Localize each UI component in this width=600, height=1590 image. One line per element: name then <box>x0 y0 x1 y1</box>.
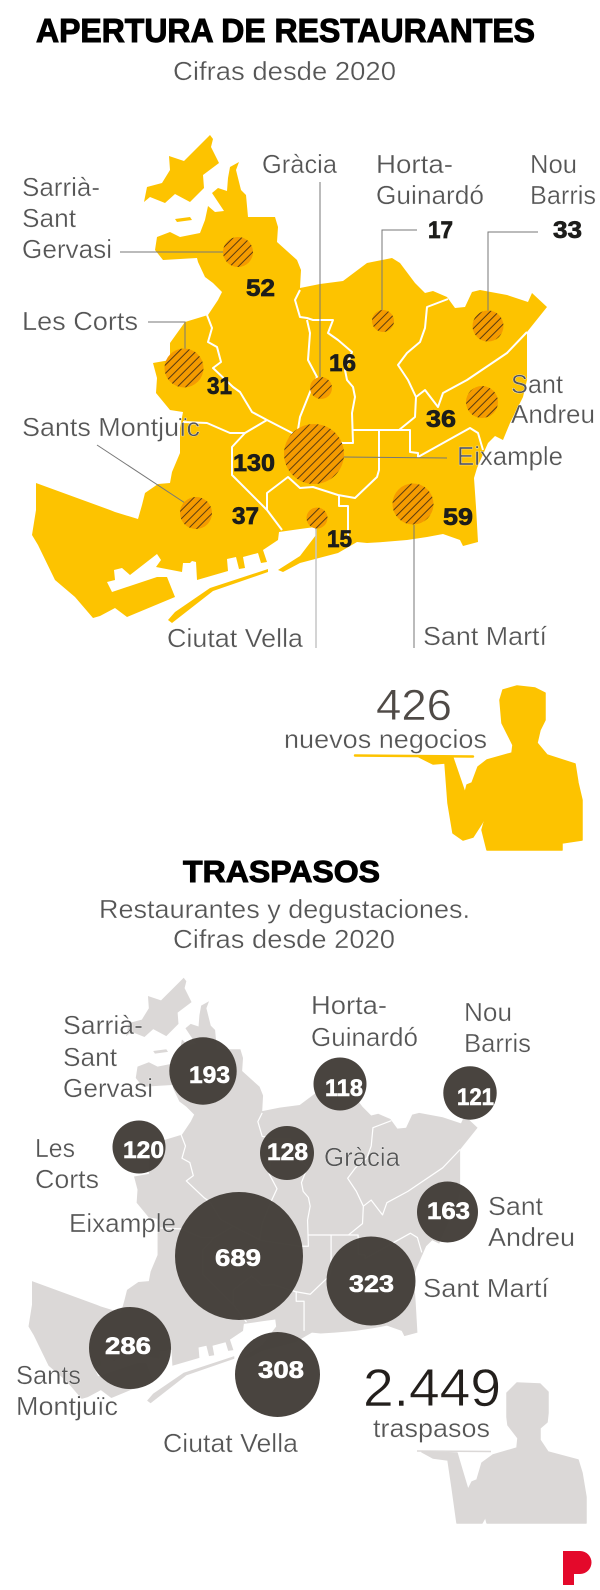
values openings: 15 <box>327 526 352 553</box>
district labels openings: Sant <box>511 369 564 399</box>
district labels openings: Andreu <box>511 399 595 429</box>
map: openings by district <box>32 135 547 623</box>
values openings: 130 <box>233 450 275 477</box>
district labels transfers: Corts <box>35 1164 99 1194</box>
district labels openings: Sant <box>22 203 77 233</box>
district labels transfers: Eixample <box>69 1208 176 1238</box>
bubbles transfers <box>89 1037 497 1417</box>
values openings: 16 <box>329 350 356 377</box>
leader lines openings <box>97 182 538 648</box>
district labels transfers: Ciutat Vella <box>163 1428 299 1458</box>
district labels openings <box>22 149 596 653</box>
district labels openings: Sarrià- <box>22 172 100 202</box>
district labels transfers: Horta- <box>311 990 387 1020</box>
values openings: 59 <box>443 504 473 531</box>
district labels openings: Ciutat Vella <box>167 623 304 653</box>
district labels openings: Gervasi <box>22 234 112 264</box>
subtitle traspasos <box>99 894 470 954</box>
total transfers <box>363 1359 501 1443</box>
values transfers: 128 <box>267 1139 308 1166</box>
district labels transfers <box>16 990 575 1458</box>
district labels transfers: Sants <box>16 1360 81 1390</box>
total openings: nuevos negocios <box>284 724 487 754</box>
values transfers: 286 <box>105 1333 151 1360</box>
district labels transfers: Sarrià- <box>63 1010 143 1040</box>
values transfers: 308 <box>258 1357 304 1384</box>
values transfers: 121 <box>457 1084 494 1111</box>
district labels openings: Nou <box>530 149 577 179</box>
values openings: 36 <box>426 406 456 433</box>
district labels openings: Barris <box>530 180 596 210</box>
district labels transfers: Gràcia <box>324 1142 401 1172</box>
total transfers: traspasos <box>373 1413 490 1443</box>
values transfers: 193 <box>189 1062 230 1089</box>
values transfers: 118 <box>325 1075 363 1102</box>
district labels transfers: Andreu <box>488 1222 575 1252</box>
values openings: 52 <box>246 275 275 302</box>
district labels transfers: Sant <box>63 1042 118 1072</box>
district labels openings: Gràcia <box>262 149 338 179</box>
values openings: 17 <box>428 217 453 244</box>
values transfers <box>105 1062 494 1384</box>
district labels transfers: Gervasi <box>63 1073 153 1103</box>
icon: yellow waiter <box>355 686 582 850</box>
total openings <box>284 681 487 754</box>
total transfers: 2.449 <box>363 1359 501 1418</box>
subtitle traspasos: Cifras desde 2020 <box>173 924 395 954</box>
district labels openings: Horta- <box>376 149 453 179</box>
district labels transfers: Nou <box>464 997 512 1027</box>
subtitle: Cifras desde 2020 <box>173 56 396 86</box>
values openings: 37 <box>232 503 259 530</box>
subtitle traspasos: Restaurantes y degustaciones. <box>99 894 470 924</box>
values transfers: 120 <box>123 1137 164 1164</box>
district labels openings: Eixample <box>457 441 563 471</box>
values openings <box>207 217 582 553</box>
values transfers: 689 <box>215 1245 261 1272</box>
total openings: 426 <box>376 681 452 730</box>
title: APERTURA DE RESTAURANTES <box>36 12 535 49</box>
district labels openings: Sant Martí <box>423 621 548 651</box>
logo: red P <box>563 1551 592 1585</box>
heading: traspasos: TRASPASOS <box>183 854 380 889</box>
district labels openings: Les Corts <box>22 306 138 336</box>
map: transfers by district <box>29 978 478 1403</box>
bubbles openings <box>164 237 504 529</box>
values openings: 31 <box>207 373 232 400</box>
icon: grey waiter <box>417 1383 586 1523</box>
district labels transfers: Sant <box>488 1191 544 1221</box>
district labels openings: Sants Montjuïc <box>22 412 200 442</box>
district labels transfers: Les <box>35 1133 75 1163</box>
district labels transfers: Guinardó <box>311 1022 418 1052</box>
values openings: 33 <box>553 217 582 244</box>
district labels openings: Guinardó <box>376 180 484 210</box>
district labels transfers: Montjuïc <box>16 1391 118 1421</box>
district labels transfers: Barris <box>464 1028 531 1058</box>
values transfers: 323 <box>349 1271 394 1298</box>
district labels transfers: Sant Martí <box>423 1273 550 1303</box>
values transfers: 163 <box>427 1198 470 1225</box>
